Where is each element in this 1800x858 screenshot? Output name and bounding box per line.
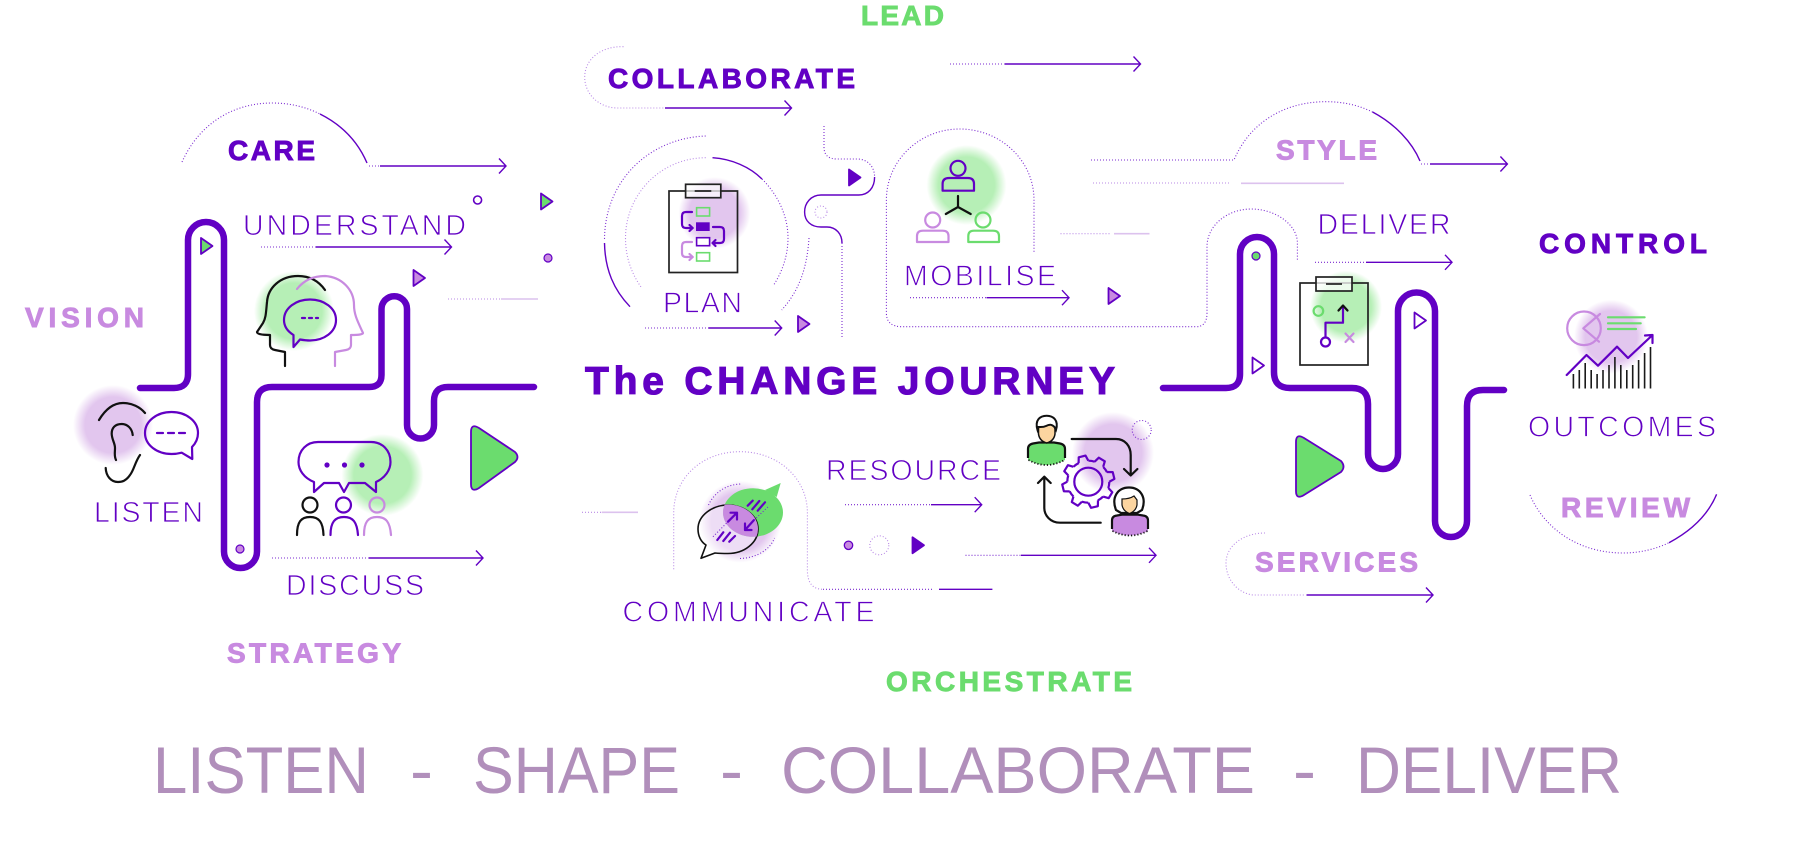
icon: mobilise team [917, 145, 1006, 242]
arrow: lead [950, 56, 1140, 72]
arrow: deliver [1315, 255, 1452, 270]
strapline: - [1293, 733, 1316, 807]
icon: resource cycle [1028, 412, 1154, 536]
style arc, lines and arrow [1060, 102, 1507, 234]
label: review: REVIEW [1561, 492, 1691, 523]
plan arcs [604, 136, 809, 310]
arrow: discuss [272, 550, 483, 566]
collaborate bracket and arrow [585, 47, 792, 116]
icon: ear and speech bubble [73, 385, 198, 482]
review arc [1530, 494, 1717, 553]
strapline: - [410, 733, 433, 807]
strapline: COLLABORATE [781, 733, 1255, 807]
label: deliver: DELIVER [1318, 209, 1450, 241]
title: The CHANGE JOURNEY [585, 360, 1115, 403]
journey line: left section [140, 222, 534, 568]
markers under resource [844, 536, 924, 555]
label: discuss: DISCUSS [286, 570, 424, 602]
icon: plan clipboard [669, 177, 750, 272]
label: resource: RESOURCE [826, 455, 1001, 487]
communicate container line [674, 452, 992, 589]
connector s-curve [805, 126, 875, 337]
strapline [153, 733, 1622, 807]
icon: deliver clipboard [1300, 271, 1382, 365]
marker dots and triangles: right [1252, 252, 1426, 374]
label: understand: UNDERSTAND [243, 210, 466, 242]
arrow and triangle: plan [645, 316, 810, 336]
arrow: understand [261, 240, 452, 254]
label: lead: LEAD [861, 0, 944, 31]
label: vision: VISION [25, 302, 144, 333]
icon: outcomes chart [1567, 300, 1652, 388]
arrow: resource [845, 497, 982, 512]
strapline: DELIVER [1356, 733, 1622, 807]
label: collaborate: COLLABORATE [608, 63, 855, 94]
strapline: LISTEN [153, 733, 369, 807]
label: mobilise: MOBILISE [904, 260, 1056, 292]
strapline: - [720, 733, 743, 807]
label: services: SERVICES [1255, 546, 1418, 578]
label: style: STYLE [1276, 134, 1377, 166]
large play: right [1296, 436, 1344, 497]
label: strategy: STRATEGY [227, 638, 401, 668]
services bracket and arrow [1226, 533, 1433, 602]
label: outcomes: OUTCOMES [1528, 412, 1716, 444]
icon: group discussion [297, 434, 424, 535]
label: plan: PLAN [663, 288, 742, 320]
label: communicate: COMMUNICATE [622, 596, 874, 628]
marker dots and triangles: left [201, 194, 552, 553]
label: control: CONTROL [1539, 228, 1707, 259]
icon: communicate bubbles [698, 481, 783, 563]
journey line: right section [1163, 237, 1504, 537]
large play: left [471, 426, 518, 490]
mobilise container line [886, 129, 1297, 327]
arrow: lower resource [966, 548, 1156, 563]
label: listen: LISTEN [94, 497, 203, 529]
faint line bottom left [582, 511, 638, 513]
faint line left [448, 298, 538, 300]
arrow and triangle: mobilise [910, 288, 1120, 305]
arc and arrow: care [182, 103, 506, 174]
strapline: SHAPE [473, 733, 680, 807]
icon: two heads with speech bubble [254, 271, 363, 366]
label: care: CARE [228, 135, 315, 166]
label: orchestrate: ORCHESTRATE [886, 666, 1132, 697]
